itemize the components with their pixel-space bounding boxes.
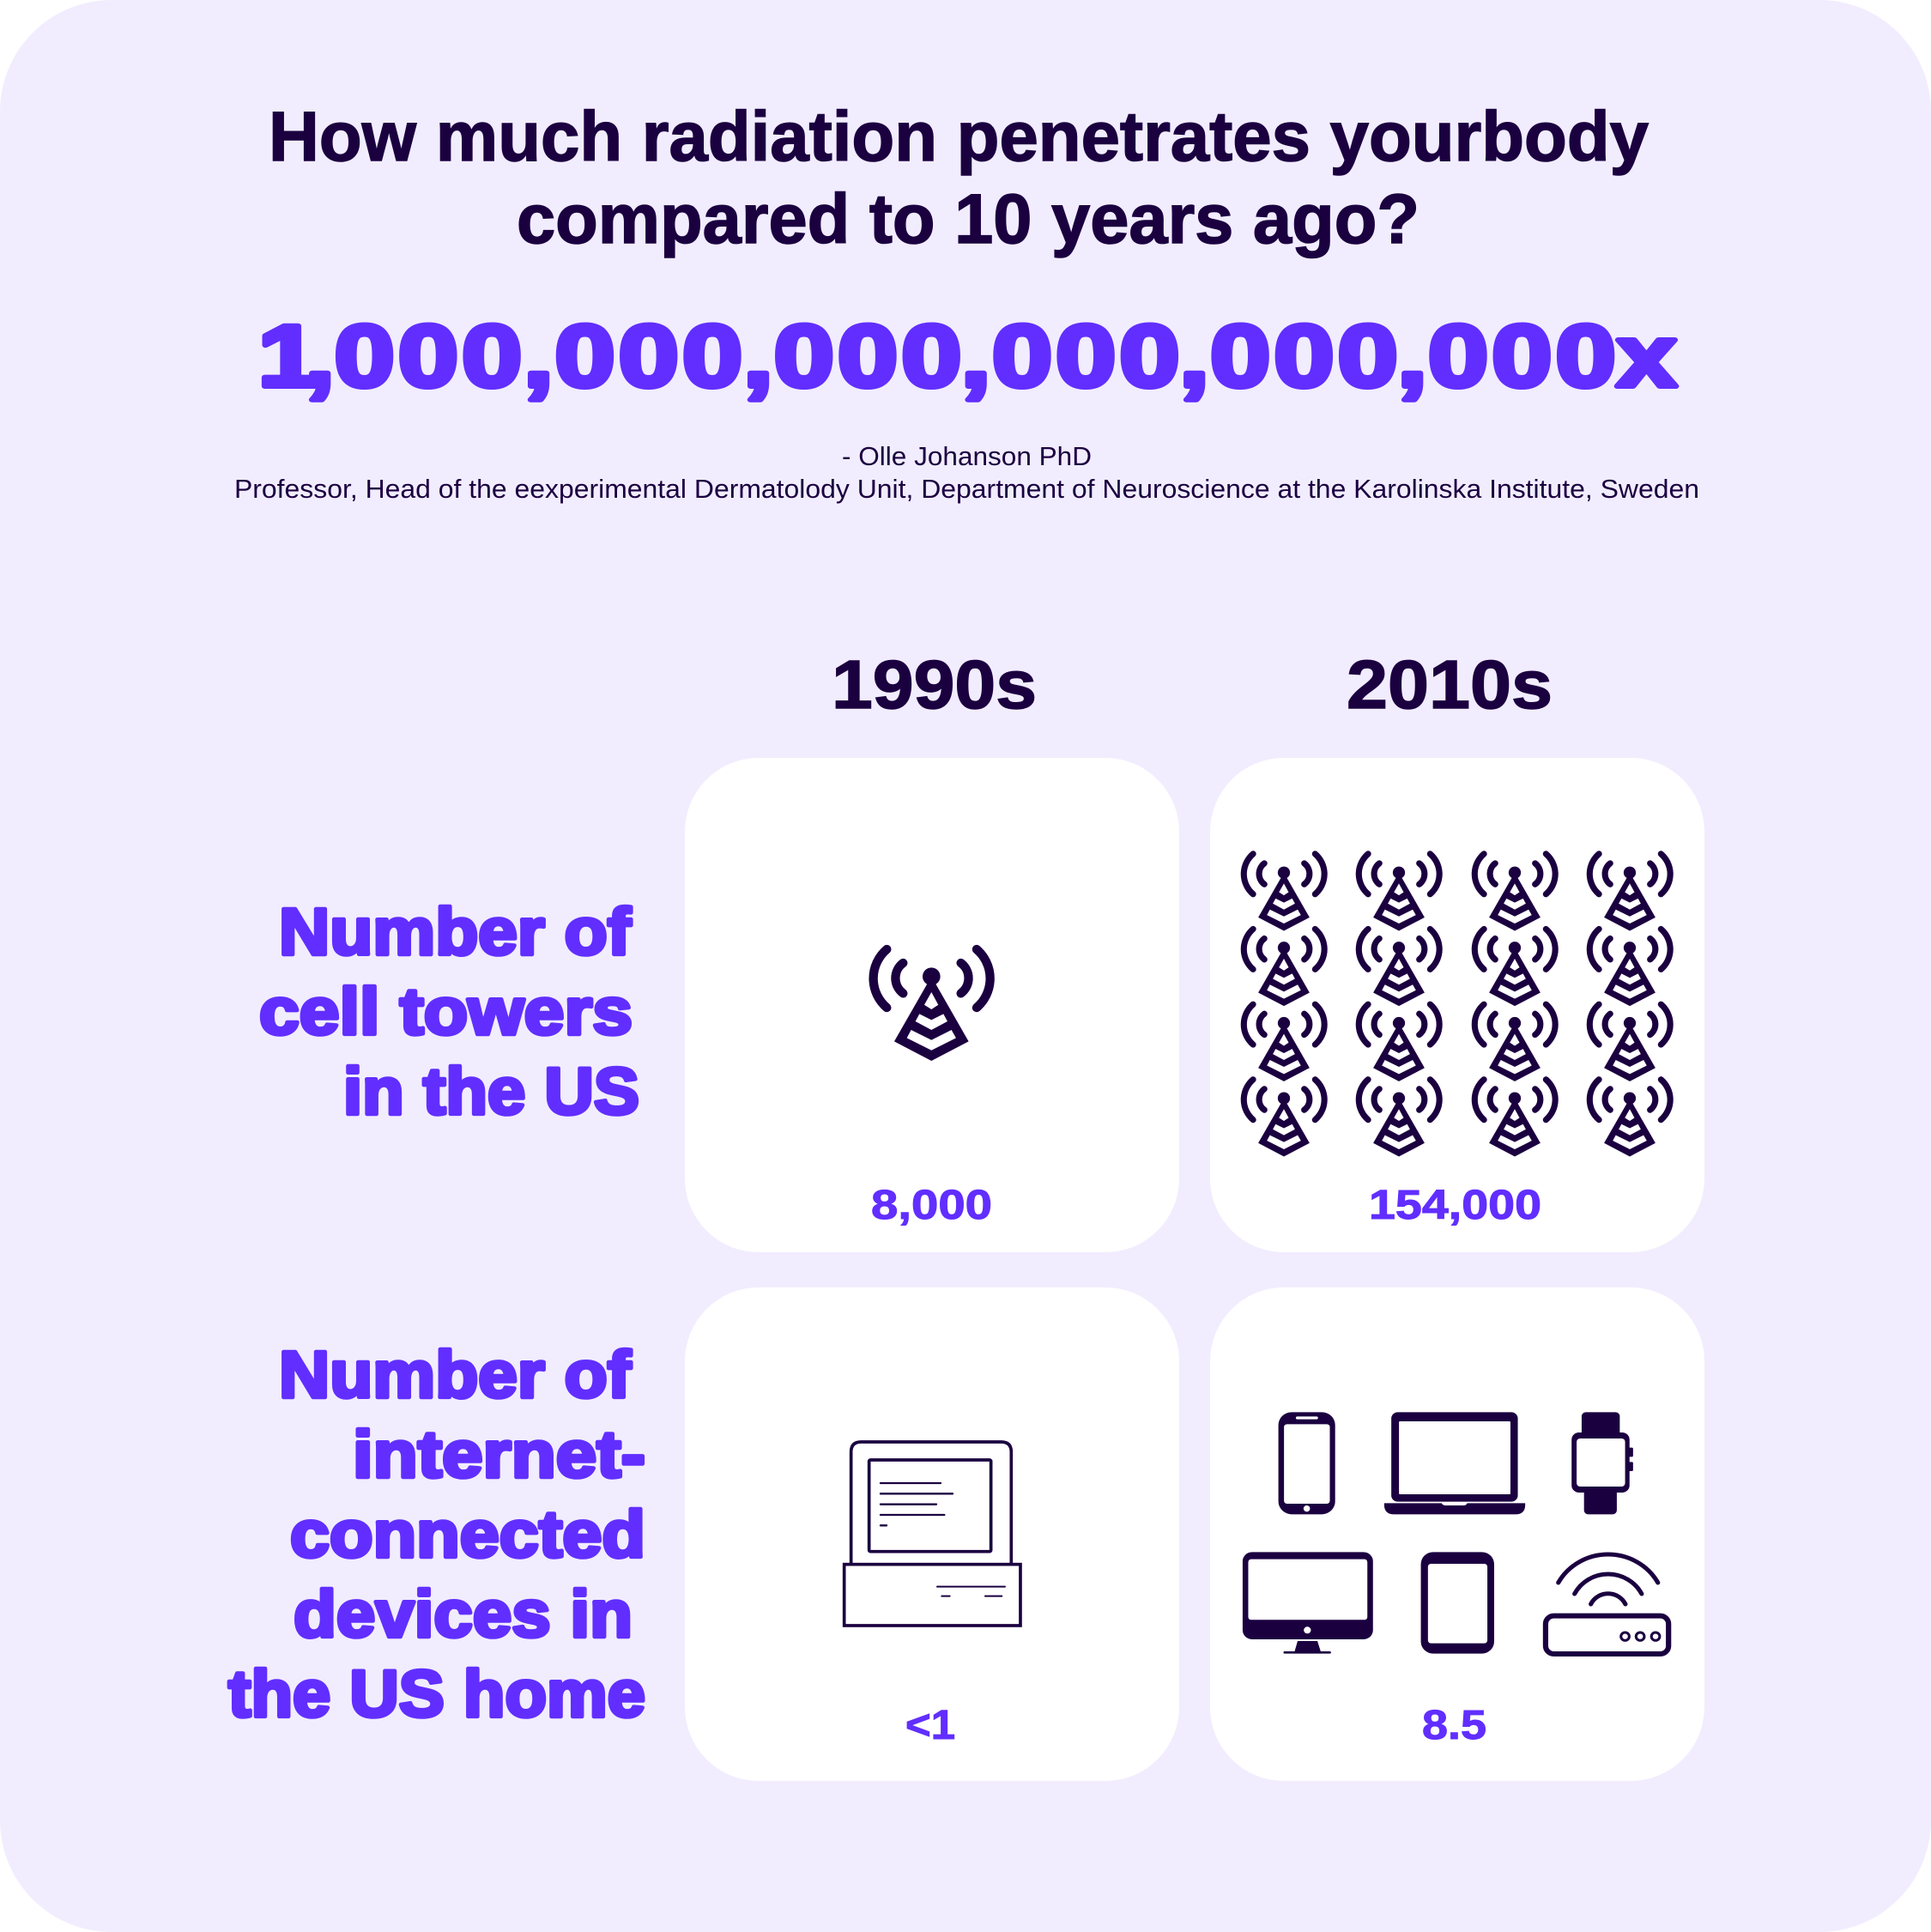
- panel: 2010s cell towers: [1210, 758, 1704, 1252]
- title: [269, 98, 1649, 258]
- row label: connected devices: devices in: [294, 1578, 633, 1651]
- panel: 1990s devices: [685, 1287, 1179, 1781]
- big number: 1,000,000,000,000,000,000x: [258, 307, 1677, 405]
- row label: connected devices: Number of: [279, 1338, 631, 1412]
- quote attribution: - Olle Johanson PhD: [842, 441, 1092, 471]
- value: 8.5: 8.5: [1422, 1703, 1486, 1748]
- column heading: 2010s: 2010s: [1347, 646, 1553, 723]
- icon: smartwatch: [1571, 1412, 1633, 1514]
- icon: old desktop computer: [844, 1442, 1020, 1626]
- icon: smartphone: [1279, 1412, 1335, 1514]
- panel: 1990s cell towers: [685, 758, 1179, 1252]
- icons: connected devices: [1243, 1412, 1668, 1654]
- icon grid: sixteen cell towers: [1244, 854, 1670, 1156]
- value: less than 1: <1: [905, 1703, 955, 1748]
- row label: connected devices: connected: [290, 1498, 645, 1572]
- title: How much radiation penetrates yourbody: [269, 98, 1649, 176]
- quote attribution: [234, 441, 1699, 504]
- row label: connected devices: internet-: [353, 1418, 645, 1492]
- row label: cell towers: in the US: [343, 1055, 639, 1129]
- icon: tablet: [1421, 1552, 1494, 1654]
- row label: connected devices: the US home: [228, 1657, 645, 1731]
- title: compared to 10 years ago?: [517, 180, 1419, 258]
- row label: cell towers: [259, 895, 639, 1129]
- row label: connected devices: [228, 1338, 645, 1731]
- column heading: 1990s: 1990s: [832, 646, 1037, 723]
- panel: 2010s devices: [1210, 1287, 1704, 1781]
- row label: cell towers: cell towers: [259, 975, 633, 1049]
- value: 8,000: 8,000: [871, 1183, 992, 1228]
- icon: laptop: [1384, 1412, 1525, 1514]
- quote attribution: Professor, Head of the eexperimental Dermatolody Unit, Department of Neuroscience at the Karolinska Institute, Sweden: [234, 474, 1699, 504]
- icon: wifi router: [1546, 1554, 1668, 1654]
- value: 154,000: 154,000: [1369, 1183, 1541, 1228]
- icon: single cell tower: [874, 949, 990, 1061]
- row label: cell towers: Number of: [279, 895, 631, 969]
- icon: desktop monitor: [1243, 1552, 1373, 1654]
